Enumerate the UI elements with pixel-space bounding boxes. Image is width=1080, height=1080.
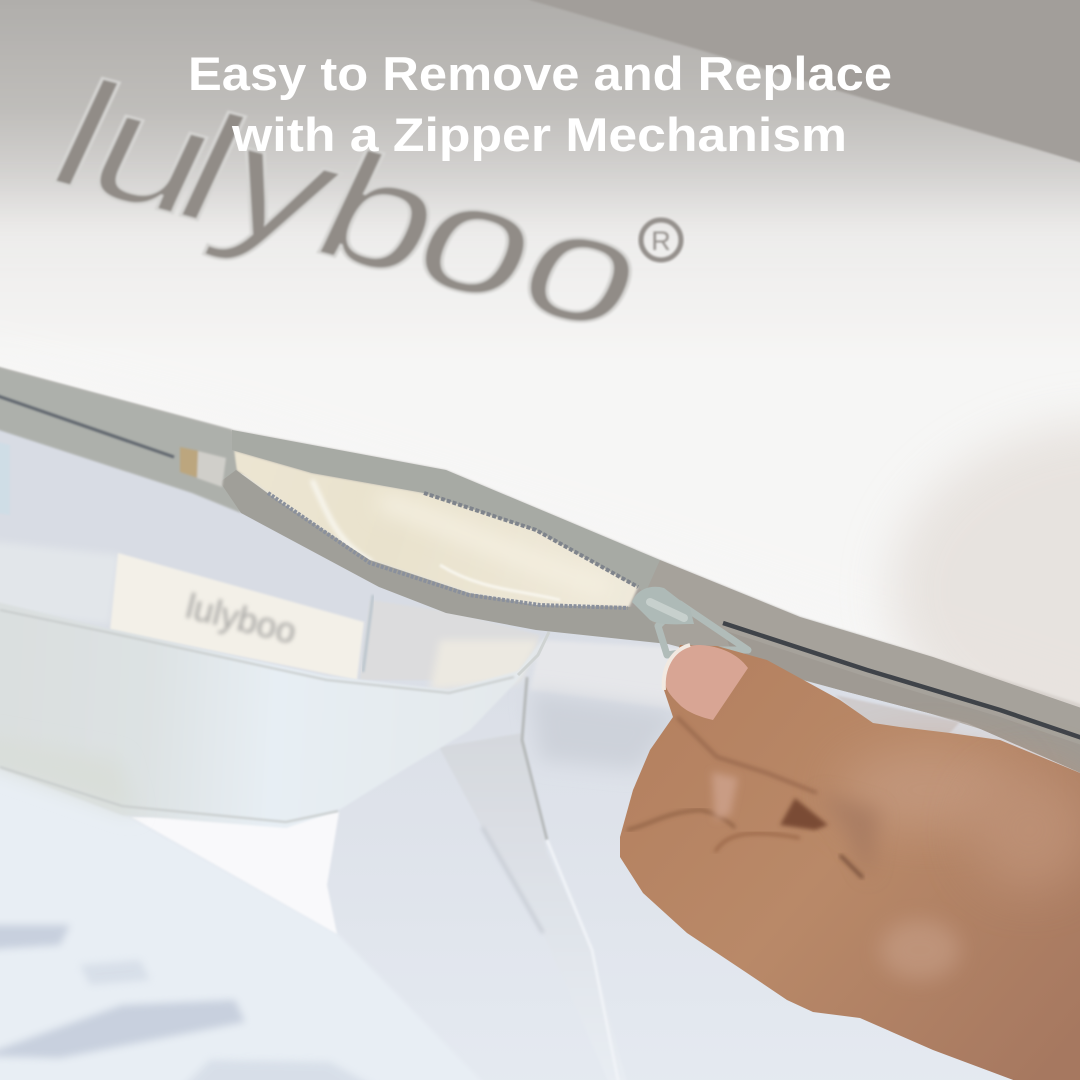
open lower tape bbox=[220, 470, 668, 644]
fold strip bbox=[439, 733, 629, 1080]
inner pocket bbox=[0, 425, 549, 690]
title: with a Zipper Mechanism bbox=[231, 108, 847, 161]
sheet under the pillow bbox=[0, 415, 1080, 1080]
closed left tape bbox=[0, 365, 241, 513]
label tag bbox=[110, 553, 364, 680]
lower left sheet bbox=[0, 760, 500, 1080]
lower teeth bbox=[268, 493, 628, 608]
upper teeth bbox=[424, 493, 638, 587]
zipper pull bbox=[632, 587, 748, 655]
light patches bbox=[840, 750, 1020, 830]
finger creases bbox=[627, 810, 735, 830]
wall corner bbox=[520, 0, 1080, 172]
hand bbox=[620, 645, 1080, 1080]
left zip line bbox=[0, 395, 174, 457]
thumb underside crease bbox=[677, 717, 817, 793]
title bbox=[188, 47, 892, 161]
zipper tape bbox=[0, 365, 1080, 777]
right zip line bbox=[723, 623, 1080, 739]
blurred sheet shadows bbox=[0, 925, 380, 1080]
title: Easy to Remove and Replace bbox=[188, 47, 892, 100]
fingertip bbox=[712, 772, 738, 820]
thumb nail bbox=[664, 645, 748, 720]
embroidered logo: lulyboo bbox=[27, 49, 675, 362]
zipper end stop bbox=[180, 447, 226, 487]
pillow body bbox=[0, 0, 1080, 760]
closed right tape bbox=[640, 560, 1080, 777]
registered mark: R bbox=[651, 226, 671, 256]
hand shape bbox=[620, 645, 1080, 1080]
pocket flap bbox=[0, 598, 549, 828]
pale strip behind thumb bbox=[835, 695, 960, 738]
opened filling bbox=[232, 450, 638, 607]
white fold below flap bbox=[131, 812, 339, 934]
knuckle gap bbox=[780, 798, 828, 830]
tag logo: lulyboo bbox=[182, 585, 301, 652]
open upper tape bbox=[232, 430, 660, 600]
registered mark bbox=[641, 220, 681, 260]
